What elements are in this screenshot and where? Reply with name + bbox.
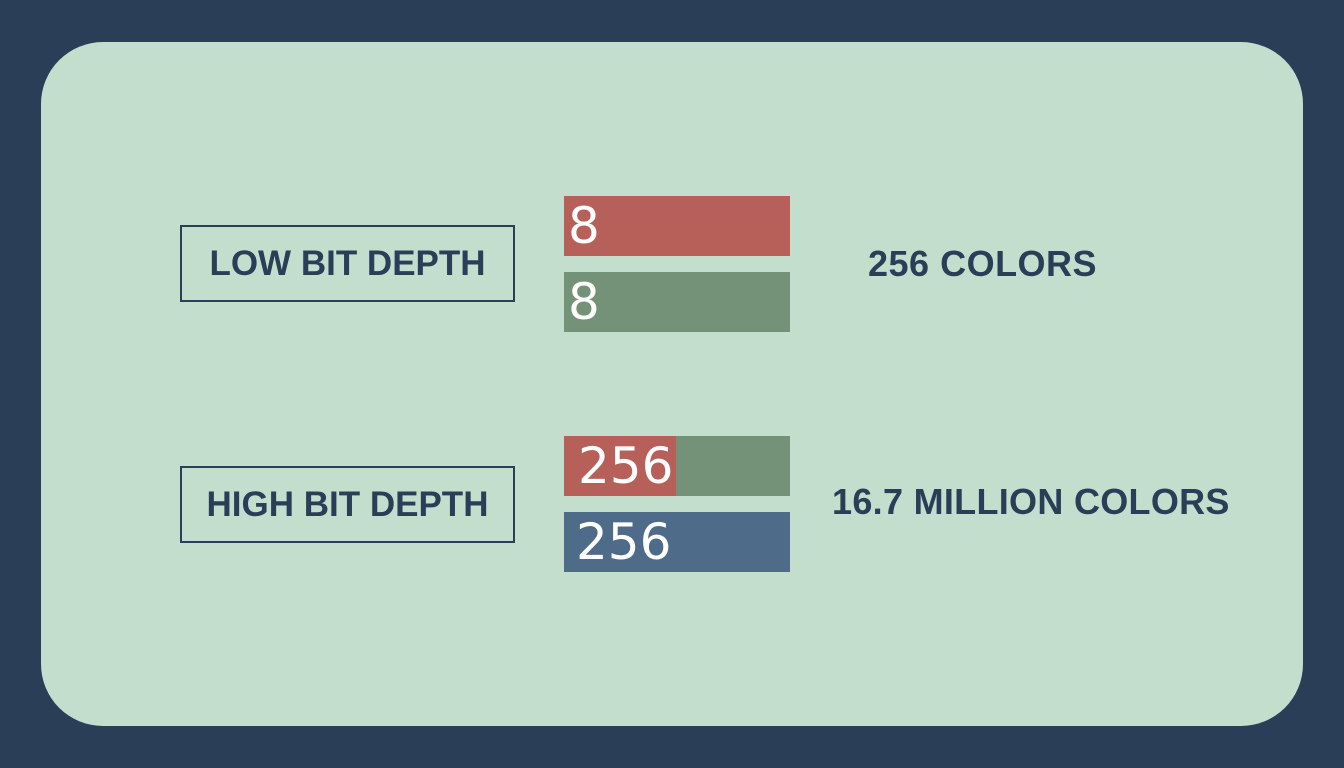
- bar: blue 256: [564, 512, 790, 572]
- bar: red/green 256: [564, 436, 790, 496]
- bar: red/green 256: 256: [578, 437, 673, 495]
- label box: low bit depth: [180, 225, 515, 302]
- bar: blue 256: 256: [576, 513, 671, 571]
- label box: low bit depth: LOW BIT DEPTH: [209, 244, 486, 282]
- bar: green 8: [564, 272, 790, 332]
- label box: high bit depth: HIGH BIT DEPTH: [207, 484, 488, 524]
- text: 256 colors: 256 COLORS: [868, 243, 1097, 284]
- label box: high bit depth: [180, 466, 515, 543]
- bar: red 8: 8: [568, 197, 600, 255]
- bar: red 8: [564, 196, 790, 256]
- bar: green 8: 8: [568, 273, 600, 331]
- text: 16.7 million colors: 16.7 MILLION COLORS: [832, 481, 1230, 522]
